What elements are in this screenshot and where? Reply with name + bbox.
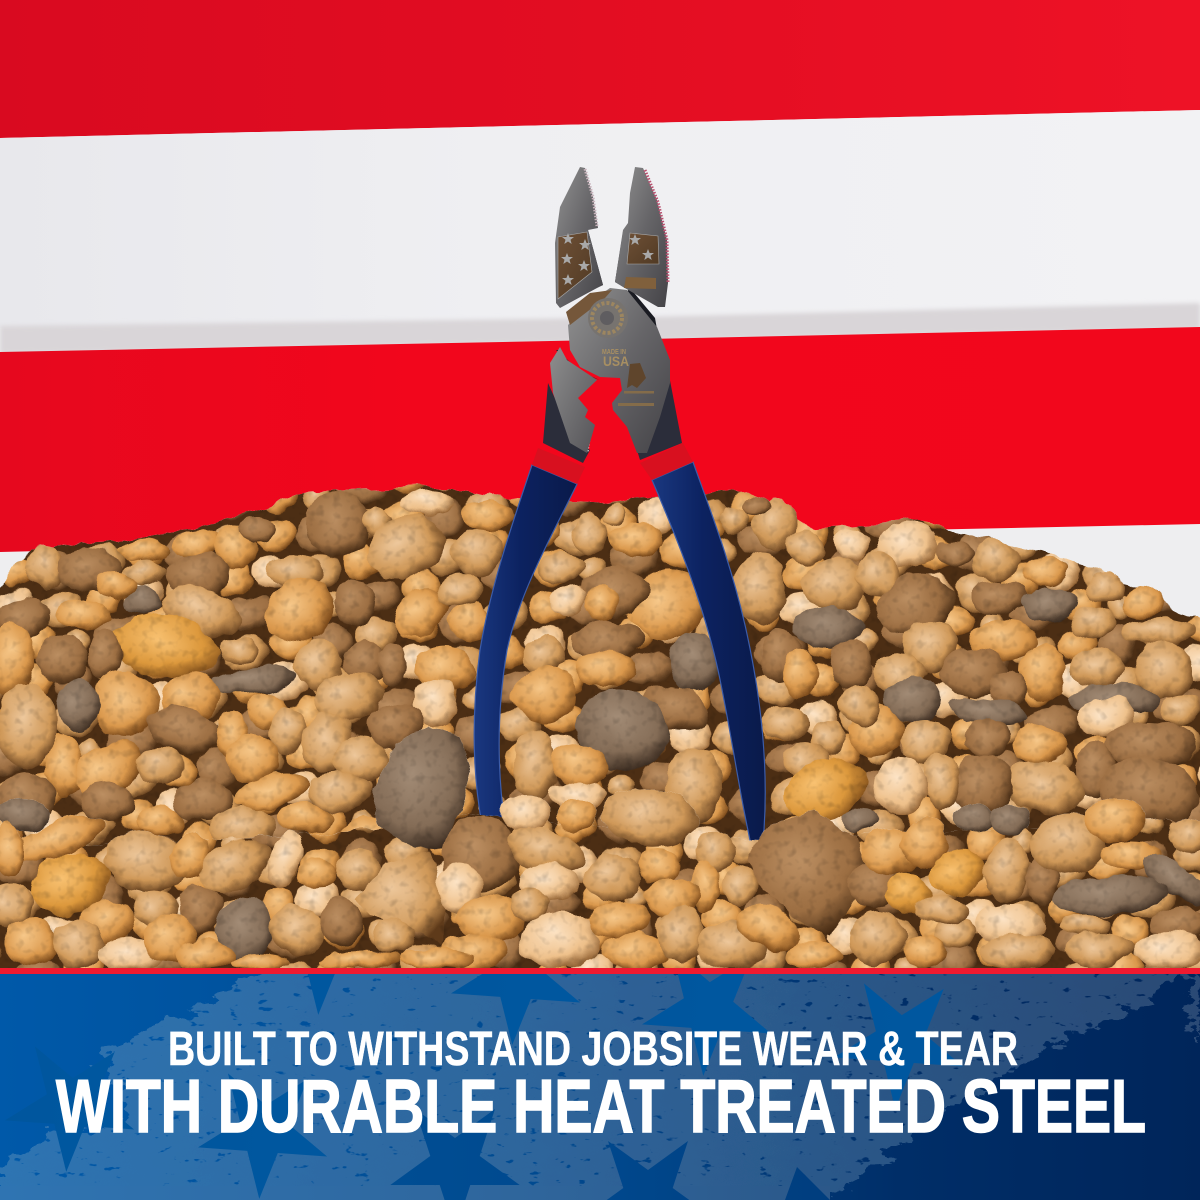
flag background bbox=[0, 0, 1200, 620]
lower left jaw bbox=[550, 347, 597, 453]
dark pivot shadow and inner edges bbox=[556, 230, 658, 380]
banner bbox=[0, 968, 1200, 1200]
central pivot plate bbox=[568, 288, 670, 453]
rock pile: front rows bbox=[0, 727, 1200, 975]
red collars bbox=[532, 443, 693, 484]
brushed light texture bbox=[0, 974, 1200, 1200]
made in USA engraving bbox=[602, 349, 629, 369]
blue gradient panel bbox=[0, 974, 1200, 1200]
made in USA engraving: USA bbox=[603, 353, 629, 369]
red top rule bbox=[0, 968, 1200, 974]
engraved pivot medallion bbox=[588, 298, 628, 338]
pliers bbox=[474, 167, 765, 862]
left jaw blade bbox=[555, 167, 603, 308]
dark textured handle necks bbox=[543, 370, 682, 463]
made in USA engraving: MADE IN bbox=[602, 349, 626, 356]
soldier emblem engraving bbox=[618, 363, 654, 406]
engraved flag panels bbox=[558, 232, 659, 325]
serrated jaw teeth bbox=[585, 169, 668, 452]
left blue handle grip bbox=[474, 465, 577, 825]
rock pile: back rows bbox=[0, 486, 1200, 975]
background stars bbox=[6, 974, 963, 1200]
right blue handle grip bbox=[652, 462, 765, 862]
right jaw blade bbox=[615, 167, 668, 307]
